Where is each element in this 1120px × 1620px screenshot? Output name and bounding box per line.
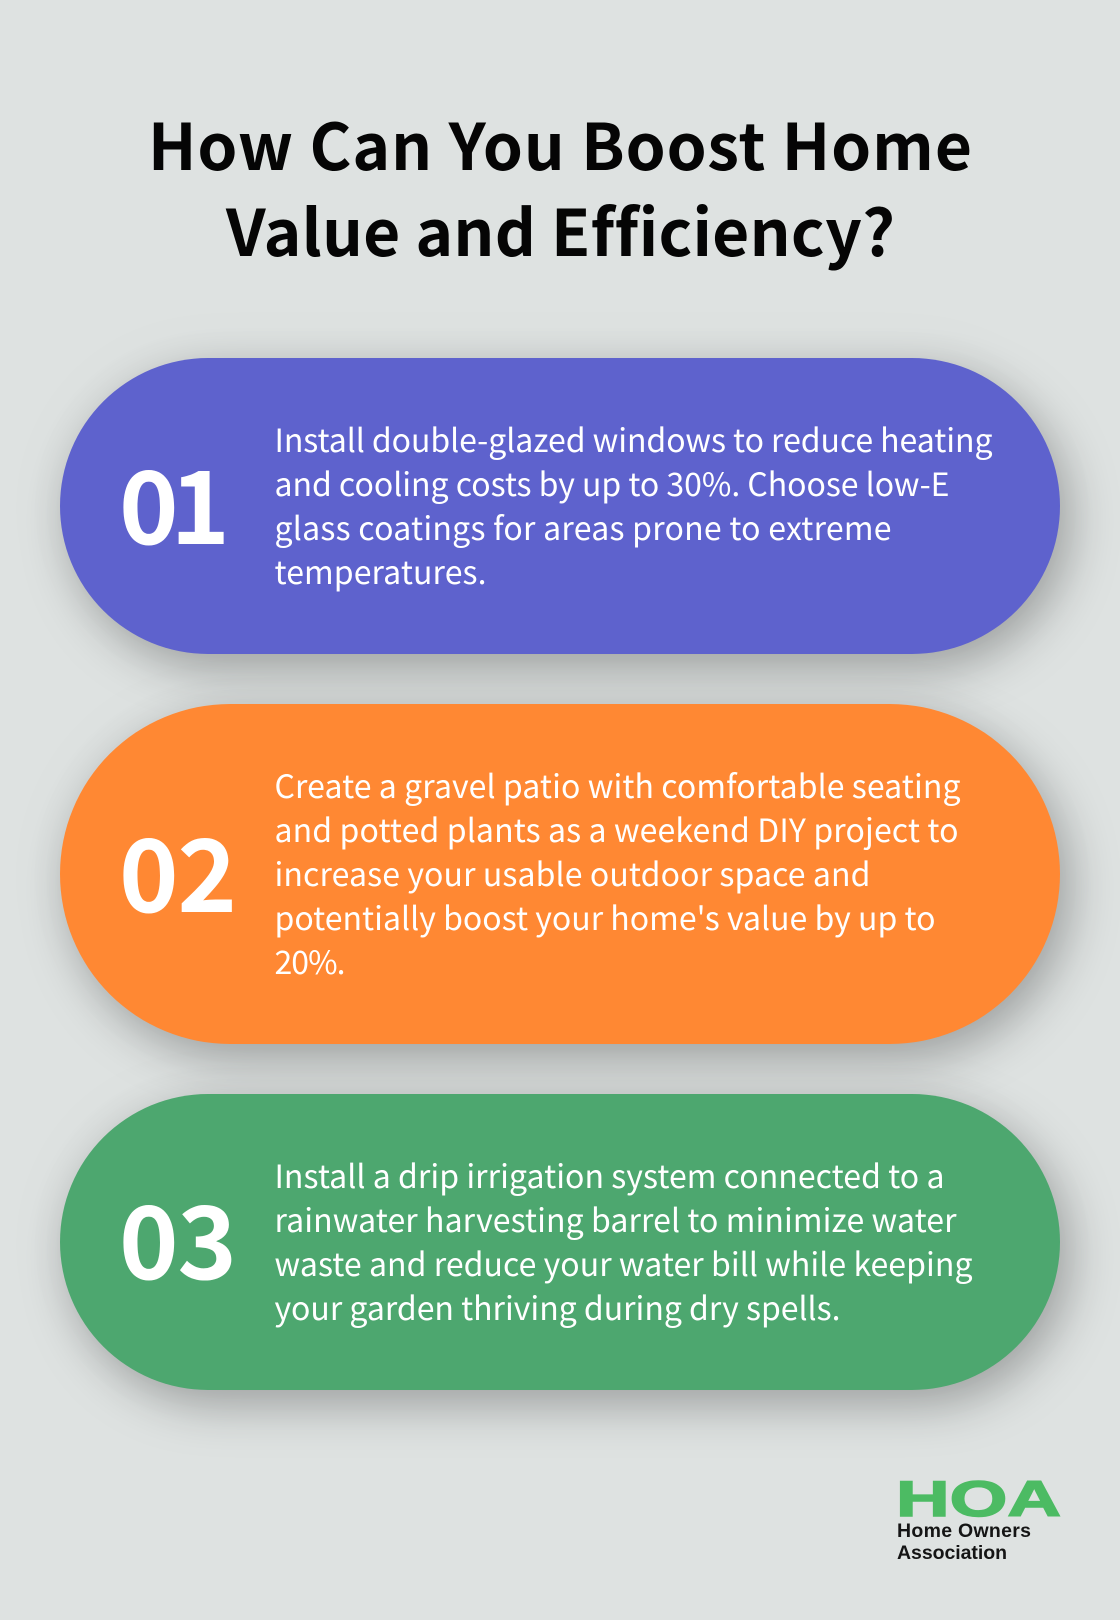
text block: step 01: temperatures. [274, 548, 486, 594]
number 01: 01 [119, 428, 230, 574]
text block: step 01: Install double-glazed windows to reduce heating [274, 416, 992, 462]
text block: step 01: and cooling costs by up to 30%. Choose low-E [274, 460, 950, 506]
text block: step 03: waste and reduce your water bill while keeping [274, 1240, 972, 1286]
text block: step 02: and potted plants as a weekend DIY project to [274, 806, 958, 852]
logo: HOA Home Owners Association [896, 1471, 1061, 1564]
logo: HOA Home Owners Association: Association [897, 1542, 1007, 1564]
text block: step 01: glass coatings for areas prone to extreme [274, 504, 892, 550]
title: Value and Efficiency? [225, 183, 895, 275]
text block: step 02: increase your usable outdoor space and [274, 850, 870, 896]
text block: step 03 [274, 1152, 972, 1330]
text block: step 02: 20%. [274, 938, 346, 984]
number 02: 02 [119, 796, 237, 942]
text block: step 03: your garden thriving during dry spells. [274, 1284, 840, 1330]
pill background: green [60, 1094, 1060, 1390]
text block: step 03: Install a drip irrigation system connected to a [274, 1152, 944, 1198]
number 03: 03 [119, 1163, 237, 1309]
text block: step 02 [274, 762, 960, 984]
panel: step 02 [60, 704, 1060, 1044]
text block: step 01 [274, 416, 992, 594]
title: How Can You Boost Home [148, 97, 972, 189]
panel: step 03 [60, 1094, 1060, 1390]
text block: step 02: Create a gravel patio with comfortable seating [274, 762, 960, 808]
title [148, 97, 972, 275]
panel: step 01 [60, 358, 1060, 654]
text block: step 03: rainwater harvesting barrel to minimize water [274, 1196, 957, 1242]
pill background: orange [60, 704, 1060, 1044]
pill background: purple [60, 358, 1060, 654]
text block: step 02: potentially boost your home's value by up to [274, 894, 936, 940]
logo: HOA Home Owners Association: Home Owners [897, 1520, 1031, 1542]
logo: HOA Home Owners Association: HOA [896, 1471, 1061, 1527]
